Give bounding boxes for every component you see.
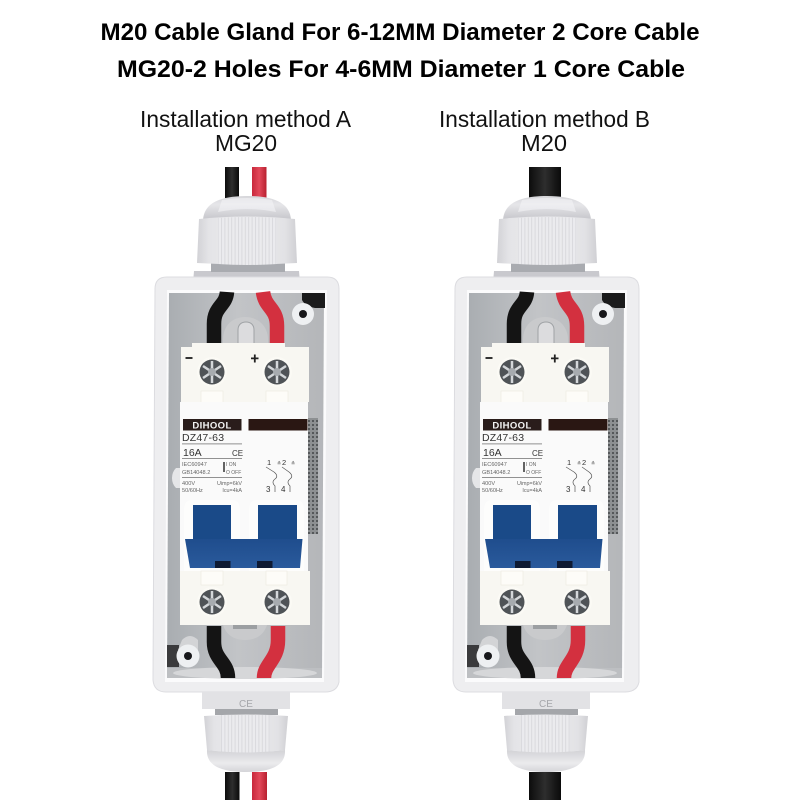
wiring diagram symbol: ≛	[577, 460, 581, 467]
polarity minus	[186, 357, 192, 359]
blank dark plate	[548, 419, 608, 430]
terminal tabs	[501, 571, 587, 585]
title line 1: M20 Cable Gland For 6-12MM Diameter 2 Core Cable	[100, 19, 700, 46]
mounting hole bottom left	[167, 636, 200, 668]
blue toggle bar	[485, 539, 602, 568]
wiring diagram symbol: ≛	[277, 460, 281, 467]
blank dark plate	[248, 419, 308, 430]
label panel	[180, 402, 308, 574]
heading: installation method A: Installation method A	[140, 106, 352, 132]
toggle housings	[484, 500, 604, 574]
lower terminal block	[480, 571, 610, 625]
title line 2: MG20-2 Holes For 4-6MM Diameter 1 Core Cable	[117, 56, 685, 83]
top cables: black and red	[225, 167, 266, 198]
model and rating text: 16A	[183, 447, 202, 459]
internal wiring: top black cable	[514, 292, 527, 344]
model and rating text: GB14048.2	[182, 470, 210, 476]
polarity minus	[486, 357, 492, 359]
mounting hole top right	[592, 293, 625, 325]
DIN rail	[308, 418, 318, 534]
wiring diagram symbol: 2	[282, 458, 286, 467]
terminal tabs	[201, 571, 287, 585]
bottom mounting slot	[523, 625, 567, 640]
breaker mounting ear	[472, 468, 480, 488]
model and rating text: 50/60Hz	[482, 488, 503, 494]
bottom cable gland: CE	[539, 699, 553, 710]
heading: installation method A	[140, 106, 352, 156]
internal wiring: bottom black cable	[214, 626, 228, 678]
model and rating text: GB14048.2	[482, 470, 510, 476]
wiring diagram symbol: 3	[266, 485, 271, 494]
model and rating text: 400V	[482, 481, 495, 487]
wiring diagram symbol: 1	[567, 458, 571, 467]
heading: installation method B	[439, 106, 650, 156]
wiring diagram symbol: ≛	[591, 460, 595, 467]
circuit breaker body	[480, 343, 610, 625]
mounting hole top right	[292, 293, 325, 325]
model and rating text: 16A	[483, 447, 502, 459]
internal wiring: top red cable	[263, 292, 277, 344]
blue toggle left	[193, 505, 231, 540]
model and rating text: O OFF	[226, 470, 241, 476]
internal wiring: bottom red cable	[564, 626, 578, 678]
wiring diagram symbol	[266, 458, 295, 494]
bottom cable gland	[502, 692, 590, 772]
bottom mounting slot	[223, 625, 267, 640]
model and rating text: Icu=4kA	[522, 488, 542, 494]
screw lower right	[562, 587, 592, 617]
breaker mounting ear	[172, 468, 180, 488]
model and rating text: DZ47-63	[182, 432, 224, 444]
internal wiring: bottom red cable	[264, 626, 278, 678]
bottom thick black cable	[529, 772, 561, 800]
brand plate DIHOOL	[183, 419, 242, 432]
internal wiring: bottom black cable	[514, 626, 528, 678]
model and rating text: I ON	[526, 462, 537, 468]
enclosure box	[453, 277, 639, 692]
bottom cable gland	[202, 692, 290, 772]
screw lower left	[497, 587, 527, 617]
model and rating text: 50/60Hz	[182, 488, 203, 494]
wiring diagram symbol: 4	[281, 485, 286, 494]
wiring diagram symbol: 4	[581, 485, 586, 494]
unit A: MG20 two-cable installation	[153, 167, 339, 800]
screw upper left	[197, 357, 227, 387]
label panel	[480, 402, 608, 574]
model and rating text: IEC60947	[182, 462, 207, 468]
circuit breaker body	[180, 343, 310, 625]
wiring diagram symbol: 1	[267, 458, 271, 467]
screw upper right	[562, 357, 592, 387]
DIN rail	[608, 418, 618, 534]
wiring diagram symbol: ≛	[291, 460, 295, 467]
model and rating text: IEC60947	[482, 462, 507, 468]
model and rating text: Uimp=6kV	[217, 481, 242, 487]
lower terminal block	[180, 571, 310, 625]
brand plate DIHOOL: DIHOOL	[192, 420, 232, 432]
terminal tabs	[501, 391, 588, 407]
upper terminal block	[481, 343, 609, 407]
wiring diagram symbol	[566, 458, 595, 494]
model and rating text: CE	[232, 449, 243, 458]
model and rating text: I ON	[226, 462, 237, 468]
model and rating text	[482, 432, 543, 494]
mounting hole bottom left	[467, 636, 500, 668]
blue toggle bar	[185, 539, 302, 568]
brand plate DIHOOL	[483, 419, 542, 432]
terminal tabs	[201, 391, 288, 407]
brand plate DIHOOL: DIHOOL	[492, 420, 532, 432]
internal wiring: top black cable	[214, 292, 227, 344]
polarity plus	[551, 354, 558, 362]
top mounting slot	[223, 317, 268, 344]
enclosure box	[153, 277, 339, 692]
top mounting slot	[523, 317, 568, 344]
bottom cable gland: CE	[239, 699, 253, 710]
top thick black cable	[529, 167, 561, 198]
internal wiring: top red cable	[563, 292, 577, 344]
blue toggle right	[558, 505, 597, 540]
screw lower right	[262, 587, 292, 617]
screw upper right	[262, 357, 292, 387]
toggle housings	[184, 500, 304, 574]
heading: installation method B: M20	[521, 130, 567, 156]
model and rating text: 400V	[182, 481, 195, 487]
bottom cables: black and red	[225, 772, 267, 800]
wiring diagram symbol: 2	[582, 458, 586, 467]
heading: installation method B: Installation method B	[439, 106, 650, 132]
upper terminal block	[181, 343, 309, 407]
unit B: M20 single-cable installation	[453, 167, 639, 800]
model and rating text: Icu=4kA	[222, 488, 242, 494]
heading: installation method A: MG20	[215, 130, 277, 156]
blue toggle left	[493, 505, 531, 540]
model and rating text: CE	[532, 449, 543, 458]
screw lower left	[197, 587, 227, 617]
top cable gland	[494, 196, 600, 277]
wiring diagram symbol: 3	[566, 485, 571, 494]
model and rating text: O OFF	[526, 470, 541, 476]
model and rating text: DZ47-63	[482, 432, 524, 444]
top cable gland	[194, 196, 300, 277]
model and rating text: Uimp=6kV	[517, 481, 542, 487]
model and rating text	[182, 432, 243, 494]
screw upper left	[497, 357, 527, 387]
polarity plus	[251, 354, 258, 362]
blue toggle right	[258, 505, 297, 540]
